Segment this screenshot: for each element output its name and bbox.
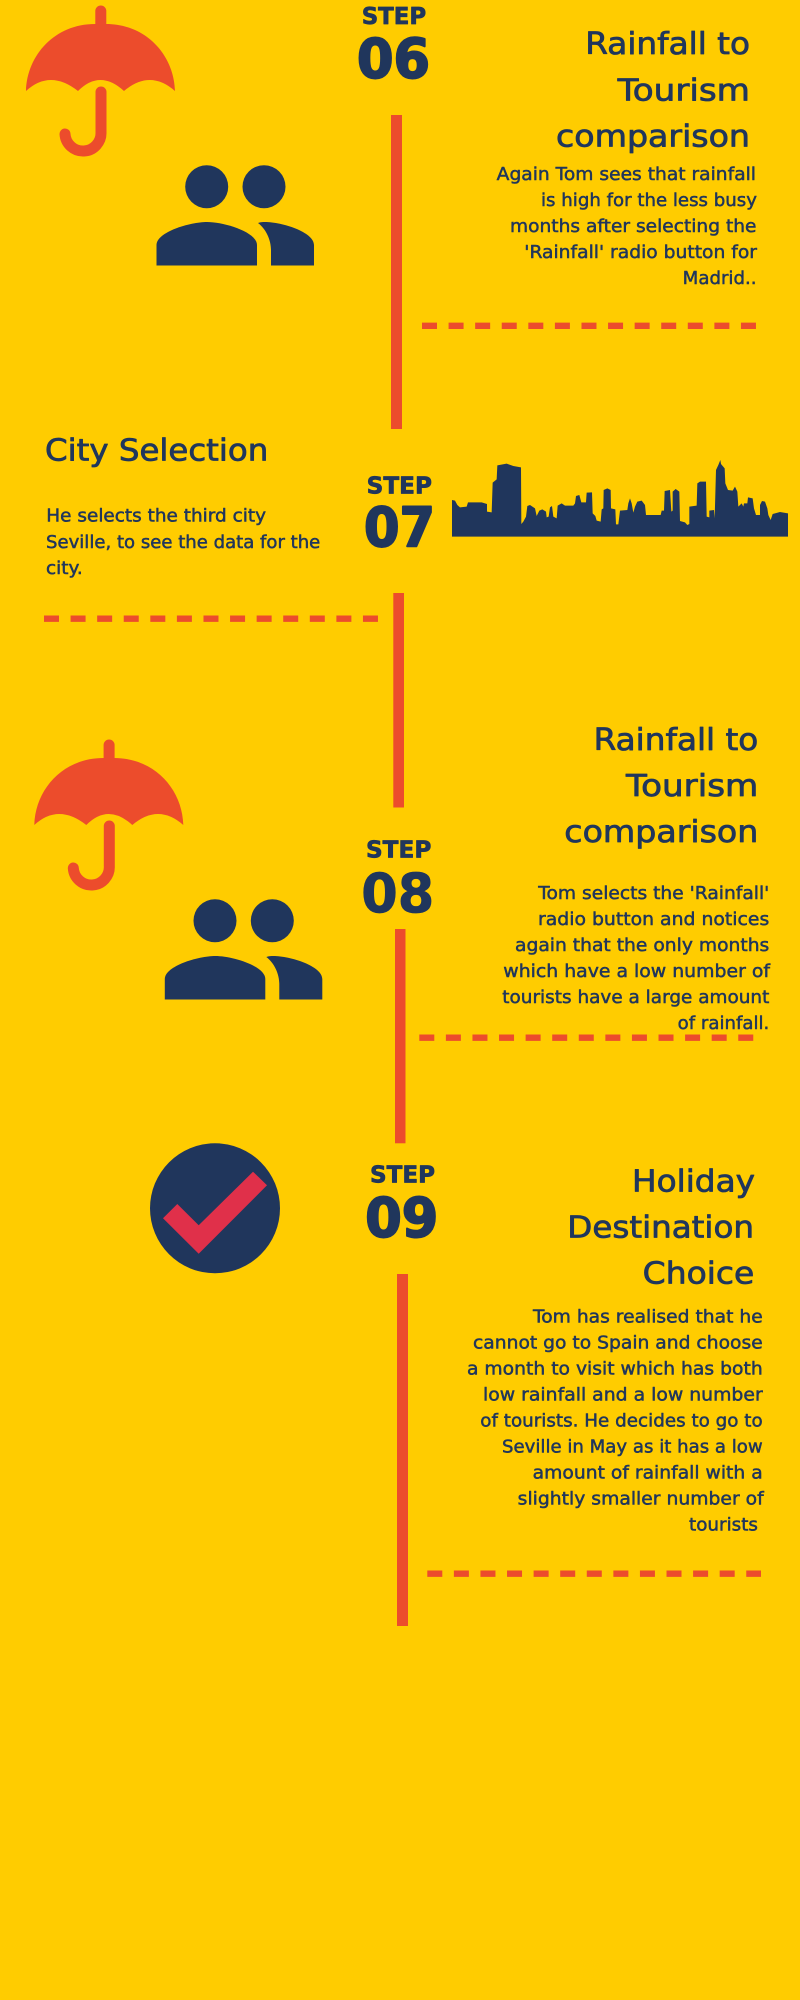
text block step 07 [46,506,320,579]
text block step 09: a month to visit which has both [467,1359,763,1380]
step label 07: 07 [364,496,435,559]
text block step 08: radio button and notices [538,909,769,930]
heading: rainfall to tourism comparison (step 06): Tourism [617,74,750,109]
text block step 09: slightly smaller number of [518,1489,764,1510]
icon: people step 08 [165,899,322,1000]
timeline bar step 06 [391,115,402,429]
heading: holiday destination choice: Destination [567,1211,754,1246]
dashed connector step 06 [422,323,756,329]
text block step 06: Again Tom sees that rainfall [497,164,756,185]
heading: rainfall to tourism comparison (step 06): Rainfall to [585,27,750,62]
dashed connector step 09 [427,1570,761,1577]
text block step 07: city. [46,558,83,579]
dashed connector step 08 [419,1034,753,1041]
timeline bar step 07 [393,593,404,808]
text block step 09: low rainfall and a low number [483,1385,763,1406]
dashed connector step 07 [44,616,378,622]
step label 08: 08 [361,862,434,925]
icon: check mark badge [150,1143,280,1273]
text block step 09: Tom has realised that he [532,1307,763,1328]
step label 06: STEP [362,4,426,30]
text block step 08: Tom selects the 'Rainfall' [537,883,769,904]
step label 06: 06 [357,28,430,90]
text block step 08 [502,883,771,1034]
heading: rainfall to tourism comparison (step 06) [556,27,750,155]
icon: umbrella step 06 [26,11,175,151]
heading: holiday destination choice [567,1165,755,1292]
timeline bar step 08 [395,929,406,1143]
text block step 09: of tourists. He decides to go to [480,1411,763,1432]
icon: people step 06 [156,165,314,266]
step label 07: STEP [367,473,432,499]
text block step 08: of rainfall. [678,1013,769,1034]
text block step 06: months after selecting the [510,216,756,237]
text block step 06: Madrid.. [683,268,756,289]
text block step 09: amount of rainfall with a [533,1463,763,1484]
heading: rainfall to tourism comparison (step 08): Rainfall to [594,723,758,758]
text block step 08: tourists have a large amount [502,987,769,1008]
step label 09: STEP [370,1163,435,1189]
timeline bar step 09 [397,1274,408,1626]
text block step 08: again that the only months [515,935,769,956]
heading: holiday destination choice: Choice [643,1257,754,1292]
heading: rainfall to tourism comparison (step 08): comparison [564,815,758,850]
text block step 06: is high for the less busy [541,190,757,211]
icon: city skyline [452,460,788,537]
heading: rainfall to tourism comparison (step 08): Tourism [625,769,758,804]
text block step 08: which have a low number of [503,961,771,982]
text block step 07: Seville, to see the data for the [46,532,320,553]
text block step 09: cannot go to Spain and choose [473,1333,763,1354]
heading: city selection: City Selection [45,434,268,469]
text block step 09: Seville in May as it has a low [502,1437,763,1458]
step label 09: 09 [365,1186,438,1250]
text block step 09 [467,1307,764,1536]
text block step 06: 'Rainfall' radio button for [524,242,758,263]
text block step 06 [497,164,758,289]
heading: holiday destination choice: Holiday [632,1165,755,1200]
text block step 09: tourists [689,1515,758,1536]
icon: umbrella step 08 [34,745,183,885]
text block step 07: He selects the third city [46,506,266,527]
step label 08: STEP [366,838,431,864]
heading: rainfall to tourism comparison (step 06): comparison [556,120,750,155]
heading: rainfall to tourism comparison (step 08) [564,723,758,850]
